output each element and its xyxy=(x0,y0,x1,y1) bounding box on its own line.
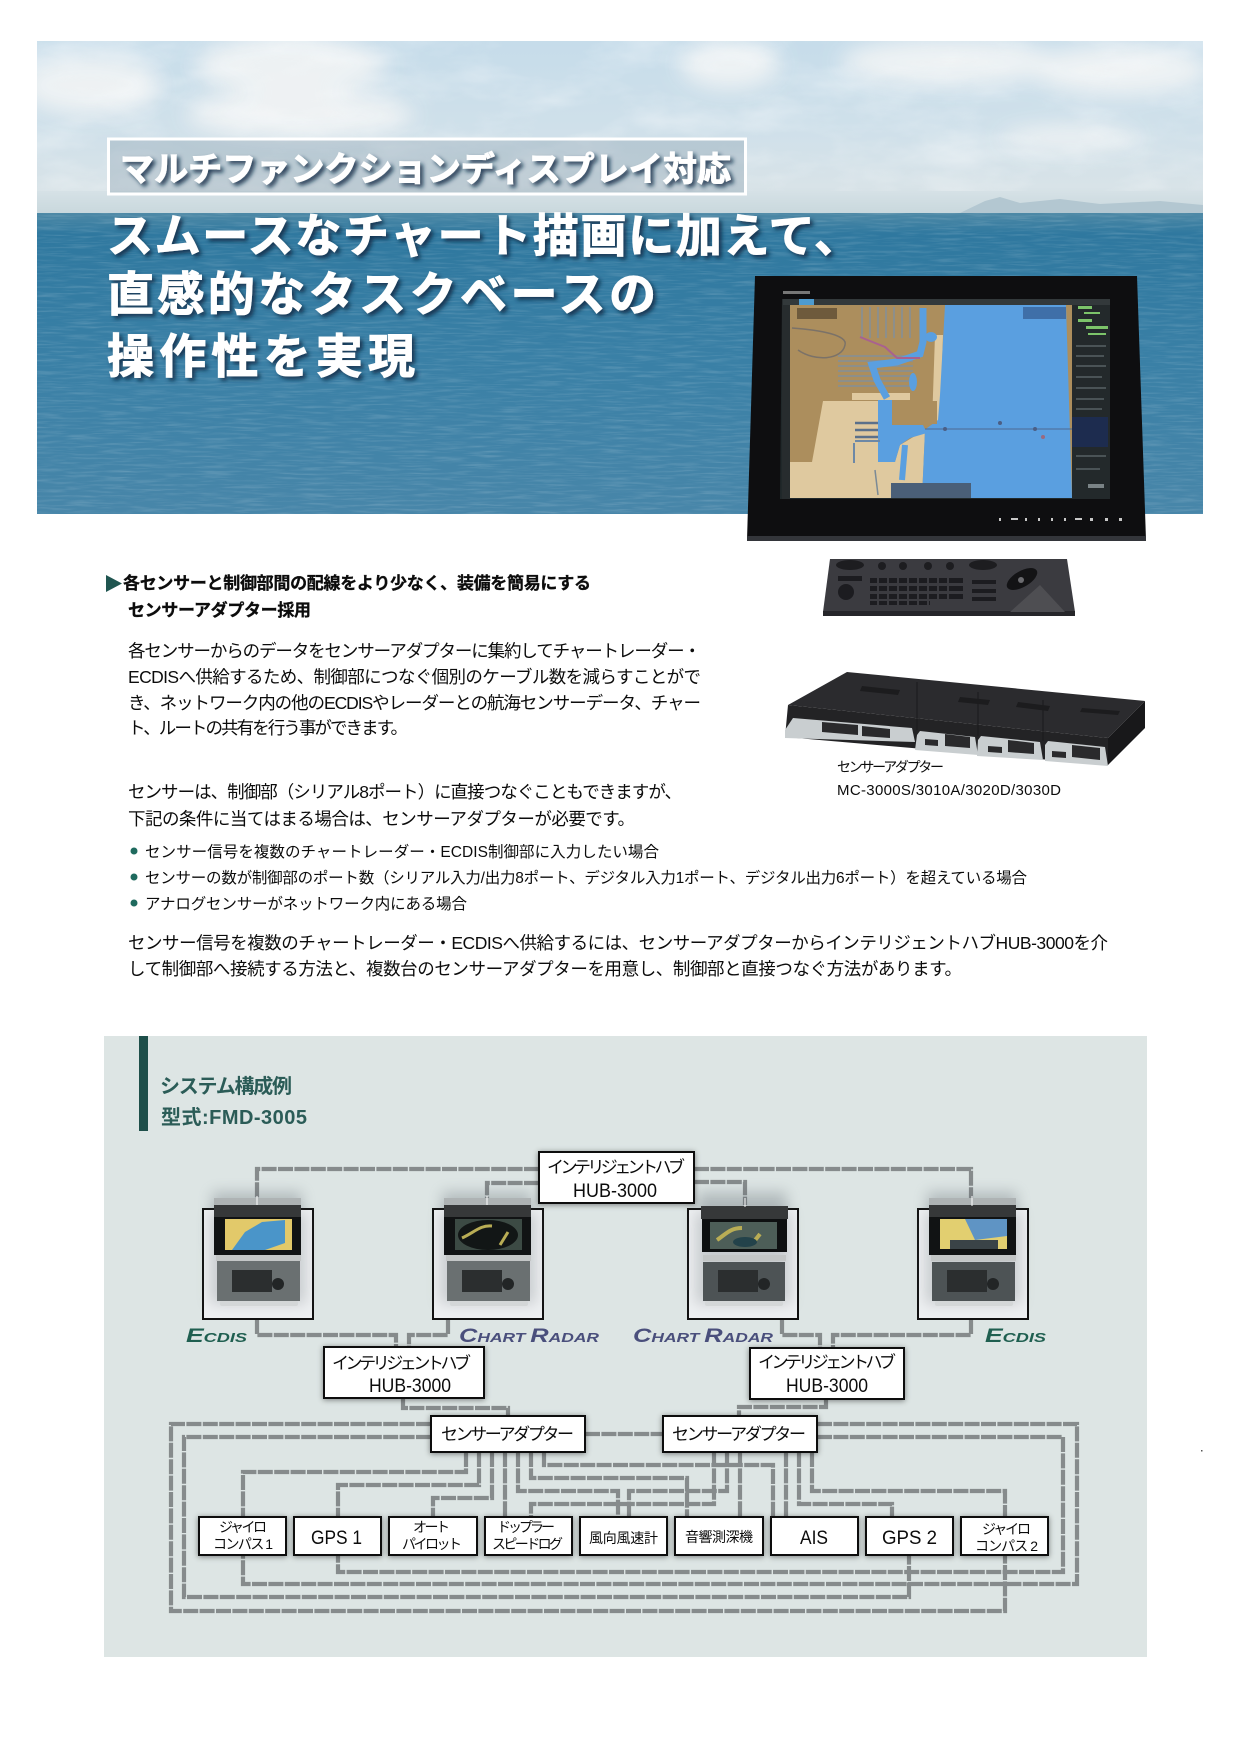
product caption: センサーアダプター xyxy=(837,759,944,775)
body text paragraph 2 xyxy=(128,782,682,829)
sensor: echo sounder xyxy=(675,1517,763,1555)
hub: left xyxy=(324,1347,484,1398)
headline: 操作性を実現 xyxy=(107,330,415,383)
body text paragraph 2: センサーは、制御部（シリアル8ポート）に直接つなぐこともできますが、 xyxy=(128,782,682,802)
hub: left: HUB-3000 xyxy=(369,1376,451,1397)
sensor: gyro compass 2: コンパス 2 xyxy=(975,1538,1038,1554)
sensor: anemometer xyxy=(580,1517,667,1555)
sensor: GPS 1: GPS 1 xyxy=(311,1528,362,1549)
bullet list xyxy=(130,843,1027,913)
body text paragraph 1: ト、ルートの共有を行う事ができます。 xyxy=(128,718,408,738)
hero photo: sky and sea background xyxy=(20,35,1210,514)
headline: スムースなチャート描画に加えて、 xyxy=(107,210,860,262)
sensor: AIS: AIS xyxy=(800,1528,828,1549)
sensor: AIS xyxy=(771,1517,858,1555)
sensor: autopilot: パイロット xyxy=(402,1536,462,1552)
sensor: gyro compass 1 xyxy=(199,1517,286,1555)
hub: top: インテリジェントハブ xyxy=(547,1157,685,1177)
sensor adapter A xyxy=(431,1416,585,1452)
sensor: doppler speed log: スピードログ xyxy=(492,1536,563,1552)
hub: top xyxy=(539,1152,694,1203)
sensor: GPS 1 xyxy=(294,1517,381,1555)
section heading: 各センサーと制御部間の配線をより少なく、装備を簡易にする xyxy=(123,573,591,593)
body text paragraph 1: き、ネットワーク内の他のECDISやレーダーとの航海センサーデータ、チャー xyxy=(128,693,701,713)
console 2: chart radar xyxy=(433,1192,543,1319)
bullet list: アナログセンサーがネットワーク内にある場合 xyxy=(145,895,467,913)
body text paragraph 1: 各センサーからのデータをセンサーアダプターに集約してチャートレーダー・ xyxy=(128,641,701,661)
section heading: センサーアダプター採用 xyxy=(128,600,311,620)
title badge: マルチファンクションディスプレイ対応 xyxy=(120,150,731,189)
sensor adapter B: センサーアダプター xyxy=(672,1425,806,1444)
hub: top: HUB-3000 xyxy=(573,1181,657,1202)
sensor: GPS 2 xyxy=(866,1517,953,1555)
console 1: ECDIS xyxy=(203,1192,313,1319)
console 3: chart radar xyxy=(688,1192,798,1319)
headline: 直感的なタスクベースの xyxy=(107,268,656,321)
panel: system configuration xyxy=(104,1036,1147,1657)
hub: left: インテリジェントハブ xyxy=(332,1353,471,1373)
hub: right xyxy=(750,1348,904,1399)
sensor adapter A: センサーアダプター xyxy=(441,1425,574,1444)
bullet list: センサー信号を複数のチャートレーダー・ECDIS制御部に入力したい場合 xyxy=(145,843,659,861)
sensor adapter B xyxy=(663,1416,817,1452)
panel heading: システム構成例 xyxy=(160,1074,292,1098)
sensor: echo sounder: 音響測深機 xyxy=(685,1529,753,1545)
panel heading: 型式:FMD-3005 xyxy=(161,1106,307,1129)
hub: right: インテリジェントハブ xyxy=(758,1352,896,1372)
sensor: gyro compass 1: コンパス 1 xyxy=(213,1536,273,1552)
product: control keyboard xyxy=(823,559,1075,616)
label: ECDIS right: E CDIS xyxy=(985,1326,1046,1347)
headline xyxy=(107,210,860,383)
cable network xyxy=(171,1169,1077,1611)
body text paragraph 3 xyxy=(128,933,1108,979)
sensor: doppler speed log xyxy=(485,1517,572,1555)
body text paragraph 1 xyxy=(128,641,701,738)
sensor: autopilot: オート xyxy=(413,1519,450,1535)
sensor: autopilot xyxy=(389,1517,477,1555)
console 4: ECDIS xyxy=(918,1192,1028,1319)
sensor: GPS 2: GPS 2 xyxy=(882,1528,937,1549)
body text paragraph 3: センサー信号を複数のチャートレーダー・ECDISへ供給するには、センサーアダプターからインテリジェントハブHUB-3000を介 xyxy=(128,933,1108,953)
sensor: doppler speed log: ドップラー xyxy=(497,1519,555,1535)
sensor: gyro compass 1: ジャイロ xyxy=(219,1519,267,1535)
product caption xyxy=(837,759,1061,799)
sensor: anemometer: 風向風速計 xyxy=(589,1530,658,1546)
panel heading xyxy=(139,1036,307,1131)
label: chart radar right: C HART R ADAR xyxy=(633,1326,774,1347)
label: chart radar left: C HART R ADAR xyxy=(459,1326,600,1347)
label: ECDIS left: E CDIS xyxy=(186,1326,247,1347)
hub: right: HUB-3000 xyxy=(786,1376,868,1397)
body text paragraph 3: して制御部へ接続する方法と、複数台のセンサーアダプターを用意し、制御部と直接つなぐ方法があります。 xyxy=(128,959,962,979)
sensor: gyro compass 2: ジャイロ xyxy=(982,1521,1031,1537)
product: sensor adapter xyxy=(785,672,1145,766)
bullet list: センサーの数が制御部のポート数（シリアル入力/出力8ポート、デジタル入力1ポート、デジタル出力6ポート）を超えている場合 xyxy=(145,868,1027,887)
product caption: MC-3000S/3010A/3020D/3030D xyxy=(837,782,1061,799)
section heading xyxy=(106,573,591,620)
sensor: gyro compass 2 xyxy=(961,1517,1048,1555)
product: chart monitor xyxy=(747,276,1146,541)
title badge xyxy=(108,139,746,194)
body text paragraph 1: ECDISへ供給するため、制御部につなぐ個別のケーブル数を減らすことがで xyxy=(128,667,701,687)
body text paragraph 2: 下記の条件に当てはまる場合は、センサーアダプターが必要です。 xyxy=(128,809,635,829)
